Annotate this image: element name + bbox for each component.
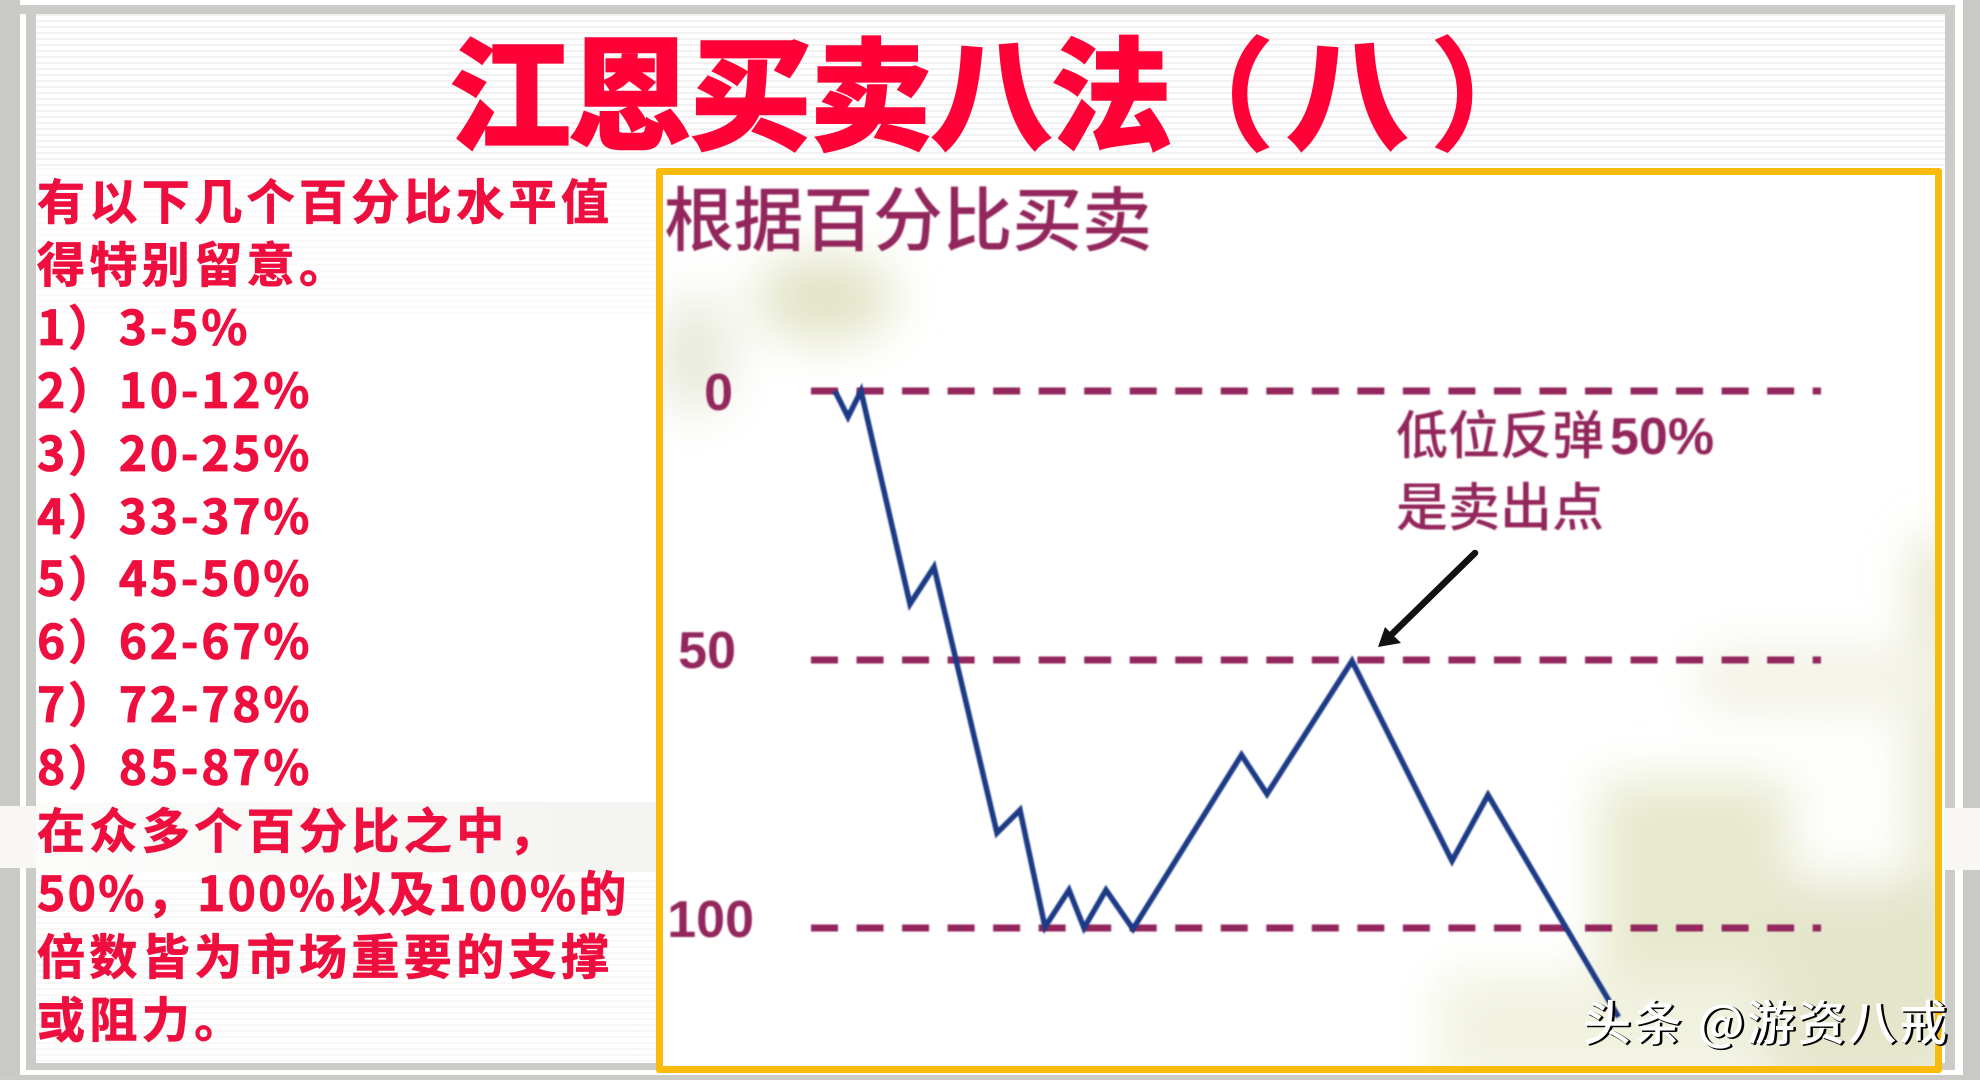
text block: percentage levels: 50%，100%以及100%的 <box>37 855 629 925</box>
text block: percentage levels: 7）72-78% <box>37 666 312 736</box>
text block: percentage levels: 4）33-37% <box>37 478 312 548</box>
dashed level lines <box>811 391 1821 928</box>
text block: percentage levels: 2）10-12% <box>37 352 312 422</box>
axis labels: 0 <box>704 364 733 422</box>
axis labels <box>667 364 754 949</box>
text block: percentage levels: 或阻力。 <box>37 981 247 1051</box>
annotation text: 是卖出点 <box>1396 466 1604 541</box>
text block: percentage levels: 1）3-5% <box>37 289 250 359</box>
text block: percentage levels: 8）85-87% <box>37 729 312 799</box>
axis labels: 50 <box>678 622 736 680</box>
watermark: 头条 @游资八戒 <box>1583 984 1947 1054</box>
chart heading: 根据百分比买卖 <box>664 165 1152 266</box>
axis labels: 100 <box>667 891 754 949</box>
text block: percentage levels: 在众多个百分比之中， <box>37 792 561 862</box>
text block: percentage levels: 5）45-50% <box>37 540 312 610</box>
annotation text: 50% <box>1610 408 1714 466</box>
title: 江恩买卖八法（八） <box>449 0 1551 176</box>
text block: percentage levels: 得特别留意。 <box>37 226 351 296</box>
panel: chart frame <box>656 168 1942 1073</box>
arrow <box>1378 553 1475 647</box>
text block: percentage levels: 3）20-25% <box>37 415 312 485</box>
annotation text: 低位反弹 <box>1396 394 1604 469</box>
text block: percentage levels <box>37 163 629 1051</box>
text block: percentage levels: 有以下几个百分比水平值 <box>37 163 613 233</box>
chart: percentage retracement <box>664 184 1948 1066</box>
price line <box>835 391 1618 1017</box>
text block: percentage levels: 倍数皆为市场重要的支撑 <box>37 918 613 988</box>
text block: percentage levels: 6）62-67% <box>37 603 312 673</box>
annotation text <box>1396 394 1714 541</box>
